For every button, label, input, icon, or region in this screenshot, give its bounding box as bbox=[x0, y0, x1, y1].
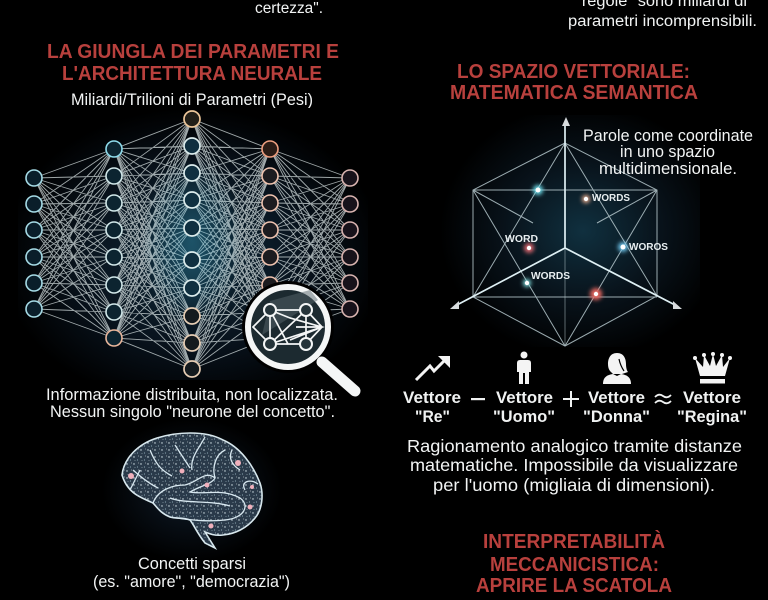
equation: vector arithmetic bbox=[403, 389, 747, 426]
central glow bbox=[142, 155, 242, 325]
second layer nodes bbox=[106, 141, 122, 346]
heading: interpretabilità meccanicistica: INTERPRETABILITÀ bbox=[483, 530, 665, 553]
panel: neural network diagram bbox=[18, 108, 368, 380]
text: distributed information: Nessun singolo "neurone del concetto". bbox=[50, 403, 335, 421]
connections between layers bbox=[34, 119, 350, 369]
equation: vector arithmetic: "Re" bbox=[415, 408, 450, 426]
heading: lo spazio vettoriale bbox=[450, 61, 698, 104]
three axes bbox=[455, 124, 677, 306]
word labels: WORDS bbox=[592, 193, 630, 204]
equation: vector arithmetic: "Uomo" bbox=[493, 408, 555, 426]
text: analogical reasoning bbox=[407, 436, 742, 495]
hexagonal cube wireframe bbox=[473, 143, 657, 346]
heading: la giungla dei parametri bbox=[47, 41, 339, 85]
caption: scattered concepts bbox=[93, 555, 290, 591]
text: words as coordinates: Parole come coordinate bbox=[583, 127, 753, 145]
text: analogical reasoning: per l'uomo (migliaia di dimensioni). bbox=[433, 475, 715, 495]
input layer nodes bbox=[26, 170, 42, 317]
caption: scattered concepts: Concetti sparsi bbox=[138, 555, 246, 573]
text: end of top left paragraph: certezza". bbox=[255, 0, 323, 17]
word labels bbox=[505, 193, 668, 282]
equation: vector arithmetic: Vettore bbox=[403, 389, 461, 407]
heading: la giungla dei parametri: LA GIUNGLA DEI PARAMETRI E bbox=[47, 41, 339, 63]
heading: lo spazio vettoriale: LO SPAZIO VETTORIALE: bbox=[457, 61, 690, 83]
fourth layer nodes bbox=[262, 141, 278, 293]
axis arrowheads bbox=[450, 117, 682, 309]
heading: interpretabilità meccanicistica: APRIRE LA SCATOLA bbox=[476, 575, 672, 597]
equation: vector arithmetic: Vettore bbox=[588, 389, 645, 407]
heading: interpretabilità meccanicistica bbox=[476, 530, 672, 597]
text: distributed information: Informazione distribuita, non localizzata. bbox=[46, 386, 338, 404]
caption: scattered concepts: (es. "amore", "democrazia") bbox=[93, 573, 290, 591]
equation: vector arithmetic: "Donna" bbox=[583, 408, 650, 426]
word labels: WORD bbox=[505, 234, 538, 245]
icon: man bbox=[517, 352, 531, 384]
text: words as coordinates: in uno spazio bbox=[620, 143, 715, 161]
word points bbox=[523, 185, 628, 300]
equation: vector arithmetic: Vettore bbox=[683, 389, 741, 407]
text: analogical reasoning: matematiche. Impossibile da visualizzare bbox=[410, 455, 738, 475]
heading: interpretabilità meccanicistica: MECCANICISTICA: bbox=[490, 554, 659, 576]
text: words as coordinates bbox=[583, 127, 753, 178]
panel: vector space diagram bbox=[440, 115, 700, 347]
subtitle: parametri: Miliardi/Trilioni di Parametri (Pesi) bbox=[71, 91, 313, 109]
central layer nodes bbox=[184, 111, 200, 377]
text: distributed information bbox=[46, 386, 338, 421]
word labels: WORDS bbox=[531, 271, 570, 282]
equation: vector arithmetic: "Regina" bbox=[677, 408, 747, 426]
output layer nodes bbox=[342, 170, 358, 317]
icon: rising arrow bbox=[416, 356, 450, 380]
icon: magnifying glass bbox=[242, 281, 355, 391]
word labels: WOROS bbox=[629, 242, 668, 253]
icon: crown bbox=[693, 352, 732, 384]
equation: vector arithmetic: Vettore bbox=[496, 389, 553, 407]
text: words as coordinates: multidimensionale. bbox=[599, 160, 737, 178]
icon: glowing brain bbox=[102, 418, 282, 562]
text: end of top right paragraph bbox=[568, 0, 757, 30]
icon: woman bbox=[603, 353, 631, 384]
text: end of top right paragraph: parametri incomprensibili. bbox=[568, 13, 757, 30]
heading: lo spazio vettoriale: MATEMATICA SEMANTICA bbox=[450, 82, 698, 104]
text: analogical reasoning: Ragionamento analogico tramite distanze bbox=[407, 436, 742, 456]
heading: la giungla dei parametri: L'ARCHITETTURA NEURALE bbox=[62, 63, 322, 85]
